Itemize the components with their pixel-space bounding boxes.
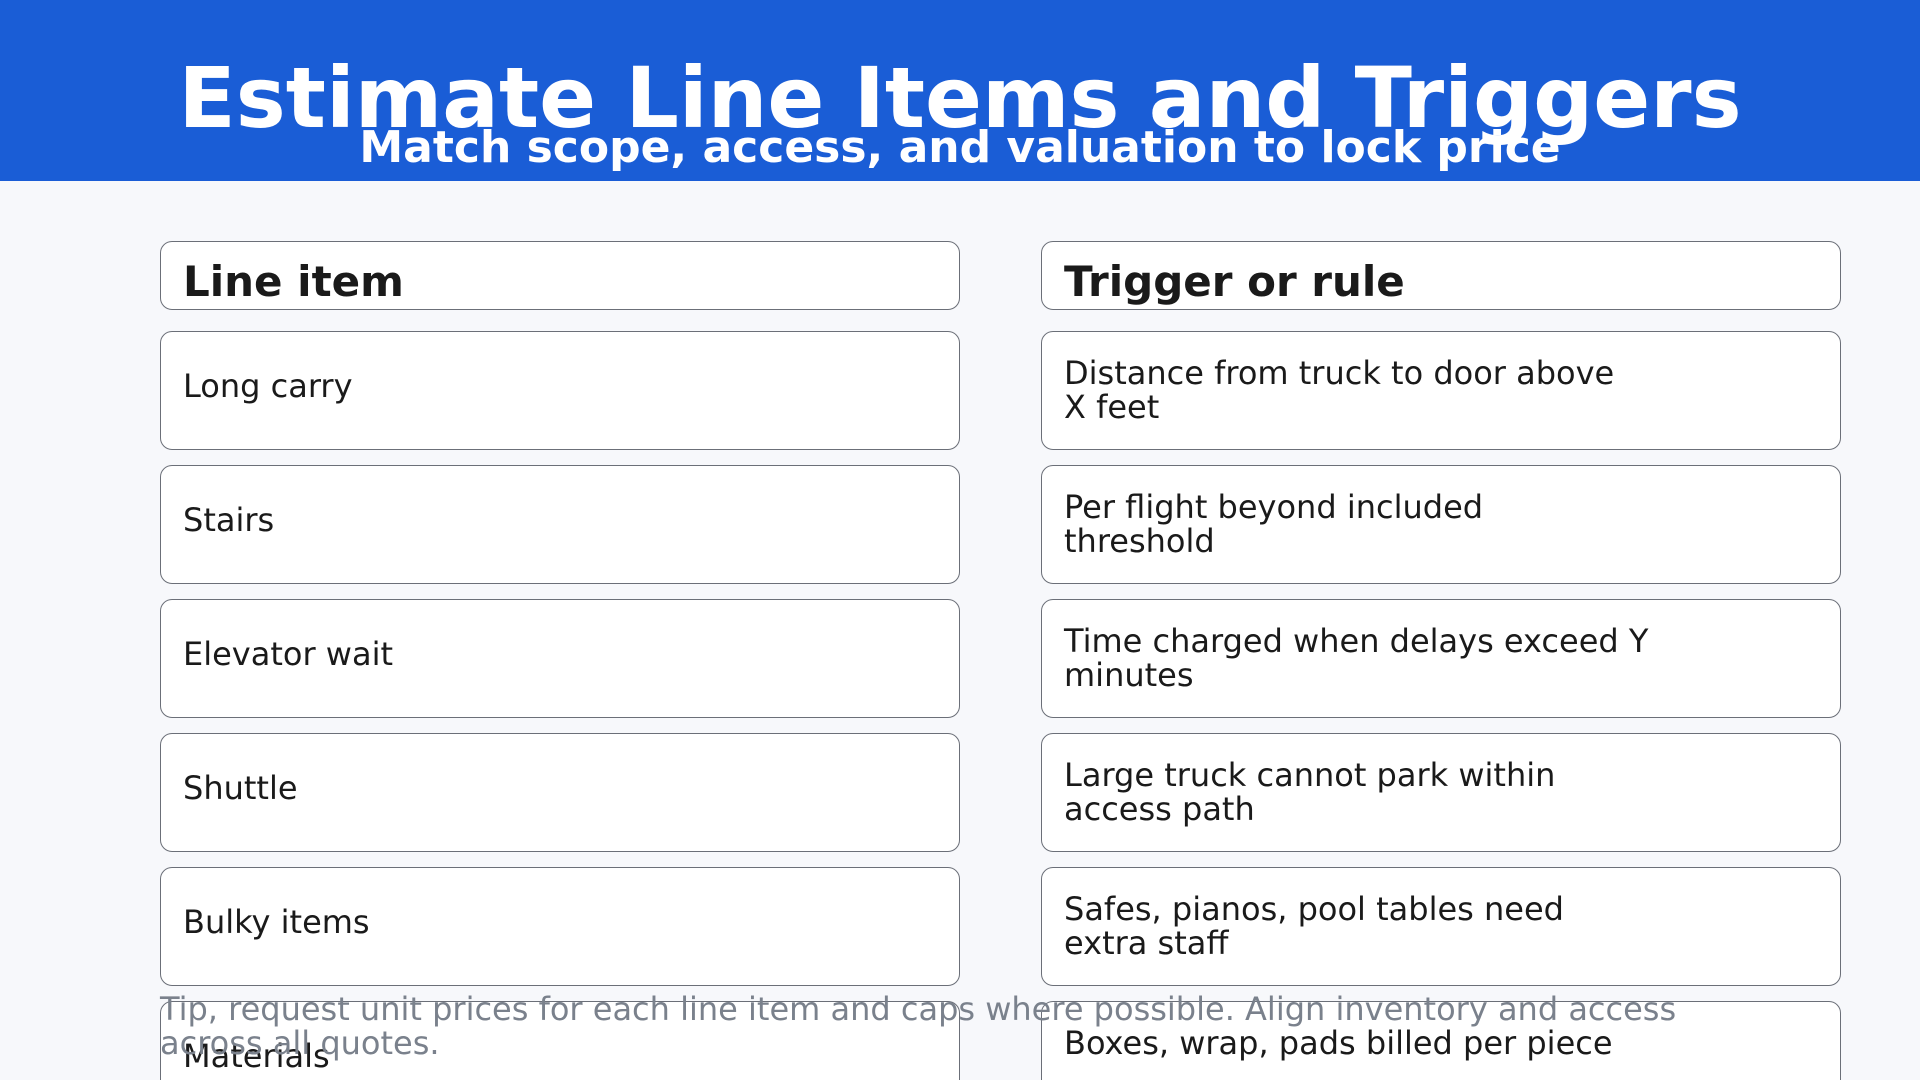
row: bulky items xyxy=(160,867,960,986)
row: bulky items: Bulky items xyxy=(183,903,370,941)
trigger: bulky items: extra staff xyxy=(1064,924,1228,962)
trigger: stairs: threshold xyxy=(1064,522,1215,560)
trigger: elevator wait: minutes xyxy=(1064,656,1194,694)
row: elevator wait xyxy=(160,599,960,718)
subtitle: Match scope, access, and valuation to lock price xyxy=(359,122,1561,173)
trigger: shuttle: Large truck cannot park within xyxy=(1064,756,1555,794)
trigger: stairs xyxy=(1041,465,1841,584)
trigger: bulky items: Safes, pianos, pool tables need xyxy=(1064,890,1564,928)
trigger: long carry: Distance from truck to door above xyxy=(1064,354,1614,392)
trigger: long carry: X feet xyxy=(1064,388,1159,426)
tip text xyxy=(160,990,1676,1062)
row: elevator wait: Elevator wait xyxy=(183,635,393,673)
trigger: shuttle: access path xyxy=(1064,790,1255,828)
column header: line item: Line item xyxy=(183,257,404,306)
column header: trigger xyxy=(1041,241,1841,310)
trigger: stairs: Per flight beyond included xyxy=(1064,488,1483,526)
row: long carry xyxy=(160,331,960,450)
row: shuttle xyxy=(160,733,960,852)
row: materials: Materials xyxy=(183,1037,330,1075)
trigger: materials xyxy=(1041,1001,1841,1080)
header banner xyxy=(0,0,1920,181)
trigger: materials: Boxes, wrap, pads billed per piece xyxy=(1064,1024,1613,1062)
row: shuttle: Shuttle xyxy=(183,769,298,807)
trigger: elevator wait xyxy=(1041,599,1841,718)
row: stairs xyxy=(160,465,960,584)
trigger: shuttle xyxy=(1041,733,1841,852)
column header: line item xyxy=(160,241,960,310)
trigger: elevator wait: Time charged when delays exceed Y xyxy=(1064,622,1648,660)
title: Estimate Line Items and Triggers xyxy=(178,49,1742,147)
row: stairs: Stairs xyxy=(183,501,274,539)
column header: trigger: Trigger or rule xyxy=(1064,257,1405,306)
trigger: bulky items xyxy=(1041,867,1841,986)
tip text: across all quotes. xyxy=(160,1024,440,1062)
tip text: Tip, request unit prices for each line item and caps where possible. Align inventory and access xyxy=(160,990,1676,1028)
row: materials xyxy=(160,1001,960,1080)
trigger: long carry xyxy=(1041,331,1841,450)
row: long carry: Long carry xyxy=(183,367,352,405)
